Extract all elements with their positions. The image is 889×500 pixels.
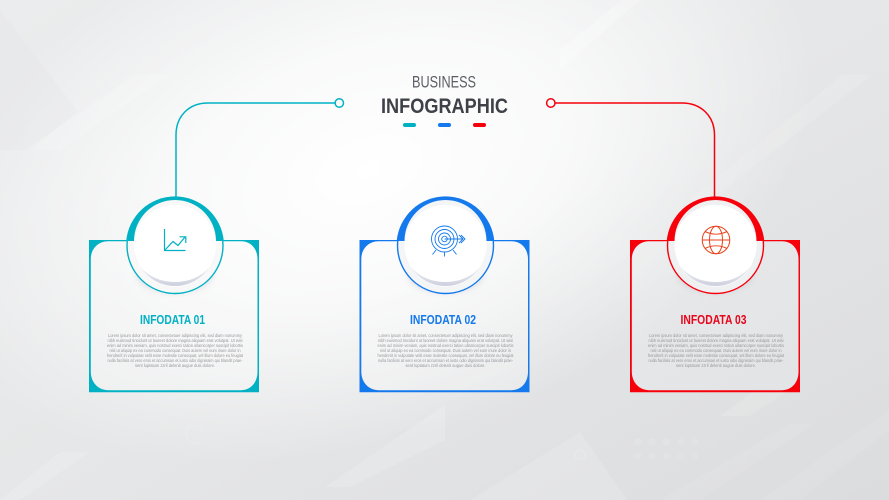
card heading: INFODATA 03 <box>680 313 747 327</box>
card fill <box>360 241 528 391</box>
card body text: hendrerit in vulputate velit esse molestie consequat, vel illum dolore eu feugiat <box>648 353 785 358</box>
card body text <box>378 333 514 368</box>
title <box>381 74 508 127</box>
icon: line chart <box>164 229 186 250</box>
badge <box>126 196 224 294</box>
card body text: nisl ut aliquip ex ea commodo consequat. Duis autem vel eum iriure dolor in <box>110 348 241 353</box>
card body text: nulla facilisis at vero eros et accumsan et iusto odio dignissim qui blandit prae- <box>108 358 243 363</box>
icon: target <box>432 226 465 256</box>
connector: teal <box>176 99 343 197</box>
card body text <box>107 333 244 368</box>
heading: infographic: INFOGRAPHIC <box>381 94 508 118</box>
card body text: nibh euismod tincidunt ut laoreet dolore magna aliquam erat volutpat. Ut wisi <box>378 338 513 343</box>
panel: infodata 03 <box>630 196 800 392</box>
card body text: Lorem ipsum dolor sit amet, consectetuer adipiscing elit, sed diam nonummy <box>649 333 784 338</box>
card body text: nisl ut aliquip ex ea commodo consequat. Duis autem vel eum iriure dolor in <box>650 348 782 353</box>
card heading: INFODATA 01 <box>140 313 205 327</box>
card frame <box>89 240 259 392</box>
card body text: nisl ut aliquip ex ea commodo consequat. Duis autem vel eum iriure dolor in <box>380 348 511 353</box>
card frame <box>360 240 530 392</box>
card body text: hendrerit in vulputate velit esse molestie consequat, vel illum dolore eu feugiat <box>378 353 514 358</box>
card body text: enim ad minim veniam, quis nostrud exerci tation ullamcorper suscipit lobortis <box>107 343 244 348</box>
card body text: hendrerit in vulputate velit esse molestie consequat, vel illum dolore eu feugiat <box>107 353 244 358</box>
heading: business: BUSINESS <box>412 74 476 92</box>
card body text: sent luptatum zzril delenit augue duis dolore. <box>135 363 215 368</box>
card body text: sent luptatum zzril delenit augue duis dolore. <box>676 363 756 368</box>
card body text: nibh euismod tincidunt ut laoreet dolore magna aliquam erat volutpat. Ut wisi <box>648 338 784 343</box>
card body text: enim ad minim veniam, quis nostrud exerci tation ullamcorper suscipit lobortis <box>378 343 514 348</box>
card body text: sent luptatum zzril delenit augue duis dolore. <box>406 363 486 368</box>
card body text <box>648 333 785 368</box>
card body text: nulla facilisis at vero eros et accumsan et iusto odio dignissim qui blandit prae- <box>378 358 513 363</box>
card body text: nibh euismod tincidunt ut laoreet dolore magna aliquam erat volutpat. Ut wisi <box>108 338 243 343</box>
card heading: INFODATA 02 <box>410 313 476 327</box>
card fill <box>90 241 258 391</box>
badge <box>397 196 494 294</box>
card frame <box>630 240 800 392</box>
badge <box>667 196 764 294</box>
card body text: Lorem ipsum dolor sit amet, consectetuer adipiscing elit, sed diam nonummy <box>378 333 513 338</box>
panel: infodata 01 <box>89 196 259 392</box>
card fill <box>631 241 799 391</box>
panel: infodata 02 <box>360 196 530 392</box>
colour dashes <box>403 123 486 127</box>
connector: red <box>547 99 714 197</box>
card body text: nulla facilisis at vero eros et accumsan et iusto odio dignissim qui blandit prae- <box>648 358 784 363</box>
icon: globe <box>702 226 730 254</box>
card body text: enim ad minim veniam, quis nostrud exerci tation ullamcorper suscipit lobortis <box>648 343 785 348</box>
card body text: Lorem ipsum dolor sit amet, consectetuer adipiscing elit, sed diam nonummy <box>108 333 243 338</box>
